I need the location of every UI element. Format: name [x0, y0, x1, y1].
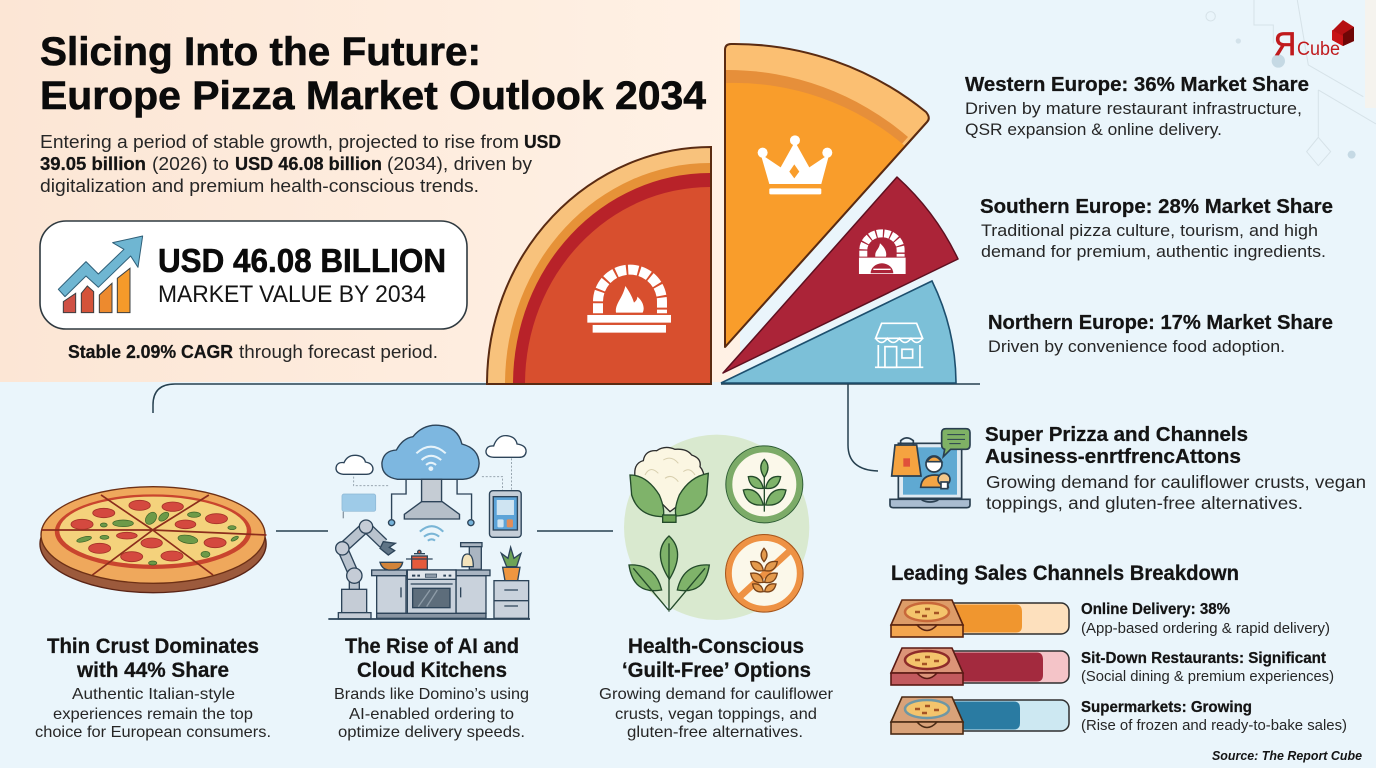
icon: laptop online ordering [890, 429, 970, 508]
callout: market value box: MARKET VALUE BY 2034 [158, 281, 426, 308]
CAGR note [68, 342, 438, 362]
icon: brick oven [587, 270, 671, 333]
row: sit-down restaurants [891, 648, 1334, 685]
intro paragraph: USD 46.08 billion [235, 154, 382, 174]
text: AI and cloud kitchens: The Rise of AI and [345, 635, 519, 658]
icon: extractor hood [388, 479, 474, 526]
text: health-conscious options: ‘Guilt-Free’ Options [622, 659, 811, 682]
text: super pizza and channels [985, 424, 1366, 513]
row: supermarkets: Supermarkets: Growing [1081, 699, 1252, 716]
text: super pizza and channels: Super Prizza and Channels [985, 424, 1248, 446]
text: AI and cloud kitchens: AI-enabled ordering to [349, 706, 514, 723]
intro paragraph: USD [524, 132, 561, 152]
icon: leaves [629, 536, 709, 612]
source note: Source: The Report Cube [1212, 749, 1362, 763]
icon: side clouds [336, 436, 526, 474]
intro paragraph: 39.05 billion [40, 154, 146, 174]
icon: store [875, 323, 923, 367]
text: AI and cloud kitchens: Brands like Domino’s using [334, 686, 529, 703]
text: super pizza and channels: Growing demand for cauliflower crusts, vegan [986, 472, 1366, 492]
intro paragraph [40, 132, 561, 196]
text: thin crust: Thin Crust Dominates [47, 635, 259, 658]
chart: pizza share slices [487, 44, 958, 384]
text: health-conscious options: crusts, vegan toppings, and [615, 706, 817, 723]
row: online delivery [891, 600, 1330, 637]
icon: pizza box [891, 648, 963, 685]
logo: RCube [1274, 20, 1354, 62]
icon: pizza box [891, 697, 963, 734]
title: Slicing Into the Future: [40, 30, 481, 74]
intro paragraph: digitalization and premium health-conscious trends. [40, 176, 479, 196]
icon: gluten-free badge [726, 535, 803, 612]
illustration: AI cloud kitchen [328, 425, 530, 619]
icon: vegan badge [726, 446, 803, 523]
text: health-conscious options: Health-Conscious [628, 635, 804, 658]
text: northern europe: Northern Europe: 17% Market Share [988, 312, 1333, 334]
intro paragraph: (2026) to [152, 154, 229, 174]
row: sit-down restaurants: Sit-Down Restaurants: Significant [1081, 650, 1327, 667]
text: super pizza and channels: toppings, and gluten-free alternatives. [986, 493, 1303, 513]
logo: RCube: Cube [1297, 39, 1340, 60]
text: western europe: Driven by mature restaurant infrastructure, [965, 99, 1302, 118]
text: southern europe: Traditional pizza culture, tourism, and high [981, 221, 1318, 240]
row: supermarkets [891, 697, 1347, 734]
slice: western europe crown [725, 44, 929, 347]
icon: tablet [489, 491, 521, 537]
lower robot and kitchen [328, 520, 530, 619]
text: super pizza and channels: Ausiness-enrtfrencAttons [985, 446, 1241, 468]
icon: crown [758, 135, 832, 194]
CAGR note: Stable 2.09% CAGR [68, 342, 233, 362]
text: AI and cloud kitchens [334, 635, 529, 741]
text: thin crust [35, 635, 271, 741]
icon: robot arm [336, 520, 395, 619]
text: thin crust: Authentic Italian-style [72, 686, 235, 703]
text: thin crust: experiences remain the top [53, 706, 253, 723]
title: Europe Pizza Market Outlook 2034 [40, 74, 707, 118]
icon: small oven [859, 233, 906, 274]
text: AI and cloud kitchens: Cloud Kitchens [357, 659, 507, 682]
text: southern europe: Southern Europe: 28% Market Share [980, 196, 1333, 218]
slice: southern europe oven [723, 177, 958, 373]
icon: growth chart arrow [58, 236, 143, 313]
text: western europe: QSR expansion & online delivery. [965, 120, 1222, 139]
row: supermarkets: (Rise of frozen and ready-to-bake sales) [1081, 717, 1347, 734]
panel: peach header background [0, 0, 740, 382]
slice: central europe oven [487, 147, 711, 384]
connector lines [153, 384, 980, 531]
icon: cauliflower [630, 447, 708, 522]
text: northern europe: Driven by convenience food adoption. [988, 337, 1285, 356]
row: sit-down restaurants: (Social dining & premium experiences) [1081, 668, 1334, 685]
icon: counter and oven [372, 543, 529, 618]
slice: northern europe store [721, 281, 956, 383]
illustration: health-conscious icons [624, 435, 809, 620]
icon: message card [342, 494, 376, 511]
logo: RCube: Я [1274, 26, 1296, 62]
row: online delivery: (App-based ordering & rapid delivery) [1081, 620, 1330, 637]
text: northern europe [988, 312, 1333, 356]
text: southern europe [980, 196, 1333, 261]
CAGR note: through forecast period. [239, 342, 438, 362]
text: thin crust: choice for European consumers. [35, 724, 271, 741]
row: online delivery: Online Delivery: 38% [1081, 601, 1230, 618]
text: health-conscious options: Growing demand for cauliflower [599, 686, 834, 703]
text: western europe [965, 74, 1309, 139]
intro paragraph: (2034), driven by [387, 154, 532, 174]
icon: pizza box [891, 600, 963, 637]
illustration: thin crust pizza [40, 487, 266, 593]
intro paragraph: Entering a period of stable growth, projected to rise from [40, 132, 519, 152]
text: western europe: Western Europe: 36% Market Share [965, 74, 1309, 96]
icon: cloud with wifi [382, 425, 479, 479]
text: southern europe: demand for premium, authentic ingredients. [981, 242, 1326, 261]
title [40, 30, 707, 118]
upper cloud and devices [336, 425, 526, 541]
text: thin crust: with 44% Share [76, 659, 229, 682]
callout: market value box [40, 221, 467, 329]
text: health-conscious options [599, 635, 834, 741]
heading: sales channels: Leading Sales Channels Breakdown [891, 562, 1239, 585]
text: health-conscious options: gluten-free alternatives. [627, 724, 803, 741]
callout: market value box: USD 46.08 BILLION [158, 242, 446, 279]
text: AI and cloud kitchens: optimize delivery speeds. [338, 724, 525, 741]
